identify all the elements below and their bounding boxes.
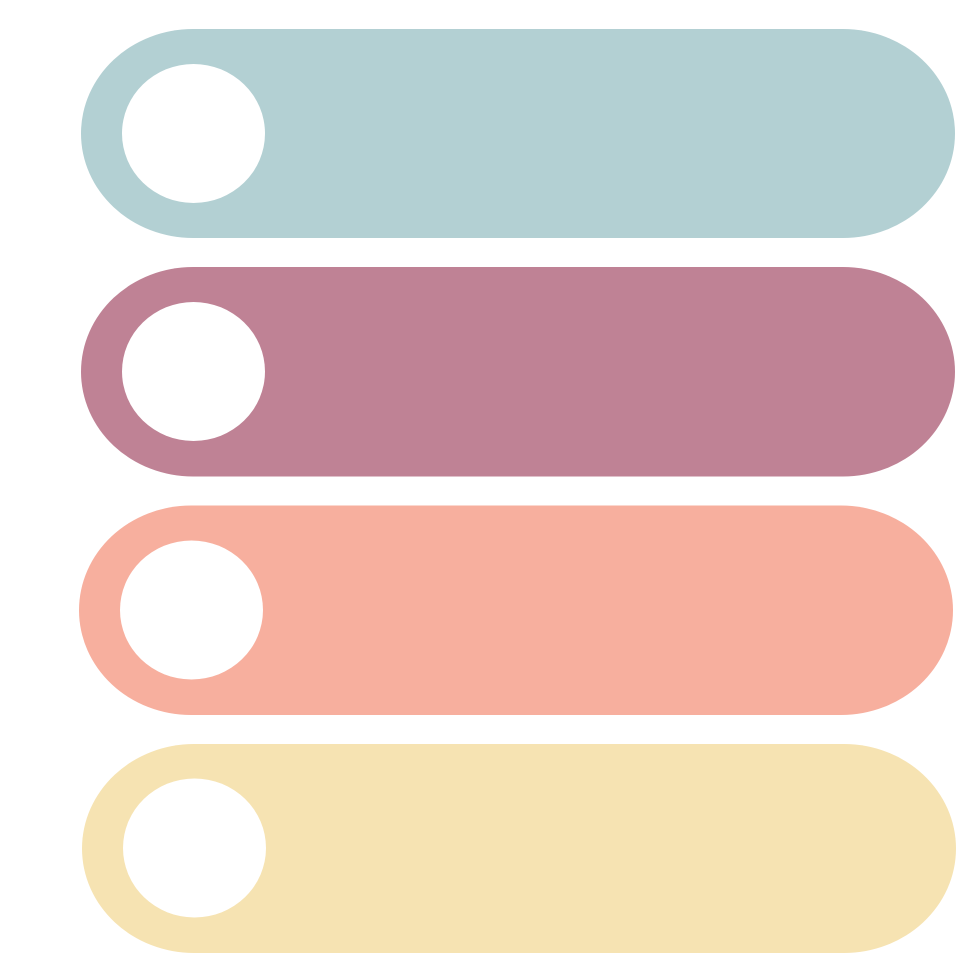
mauve pill circle: [122, 302, 265, 441]
salmon pill circle: [120, 540, 263, 680]
teal pill background: [81, 29, 955, 238]
mauve pill background: [81, 267, 955, 476]
panel: teal pill banner: [81, 29, 955, 238]
panel: salmon pill banner: [79, 506, 953, 715]
salmon pill background: [79, 506, 953, 715]
teal pill circle: [122, 64, 265, 203]
panel: yellow pill banner: [82, 744, 956, 953]
panel: mauve pill banner: [81, 267, 955, 476]
yellow pill circle: [123, 778, 266, 918]
yellow pill background: [82, 744, 956, 953]
